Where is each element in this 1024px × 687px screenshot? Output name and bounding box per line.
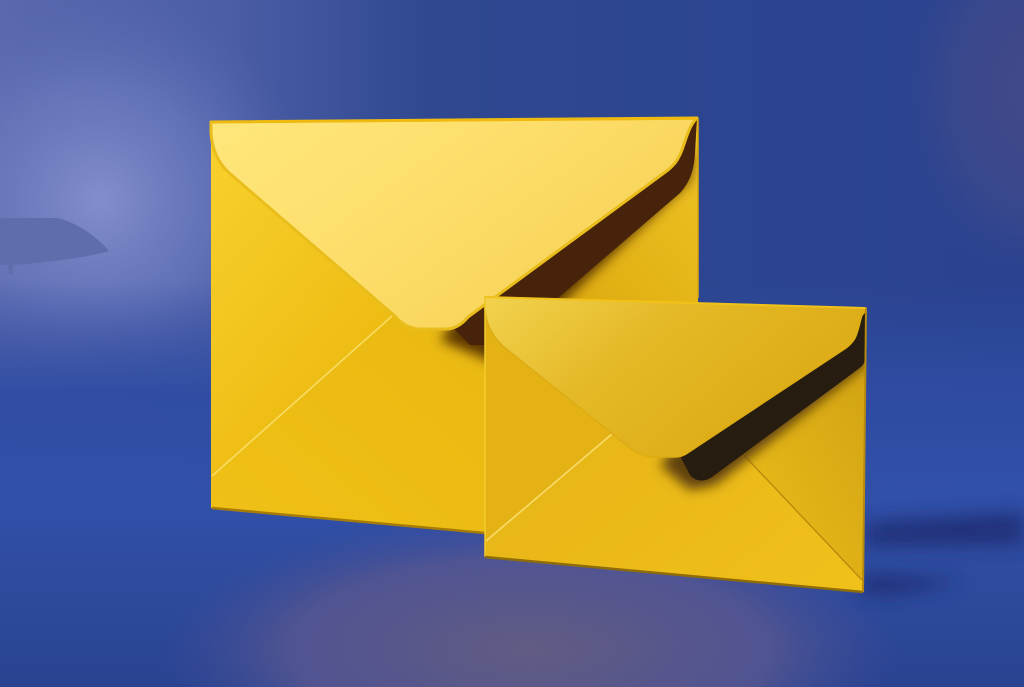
small bottom edge: [485, 557, 863, 592]
small right edge: [863, 309, 866, 592]
small top edge: [486, 297, 865, 308]
small flap soft shadow: [660, 312, 866, 490]
large envelope panels: [211, 118, 698, 533]
large flap: [211, 118, 697, 329]
small envelope: [485, 297, 866, 592]
floor shadows: [862, 512, 1024, 595]
small flap: [485, 297, 866, 457]
large fold crease: [212, 316, 392, 476]
small flap hard shadow: [678, 312, 866, 481]
small envelope panels: [485, 297, 866, 592]
small left edge: [484, 297, 486, 557]
large flap hard shadow: [450, 118, 697, 345]
small fold crease right: [722, 432, 862, 580]
large right edge: [697, 118, 699, 298]
large flap soft shadow: [440, 118, 697, 365]
large bottom edge: [212, 508, 485, 533]
large top edge: [212, 118, 697, 122]
wall shadow blob: [0, 218, 109, 274]
large envelope: [211, 118, 698, 533]
small fold crease left: [486, 434, 612, 541]
